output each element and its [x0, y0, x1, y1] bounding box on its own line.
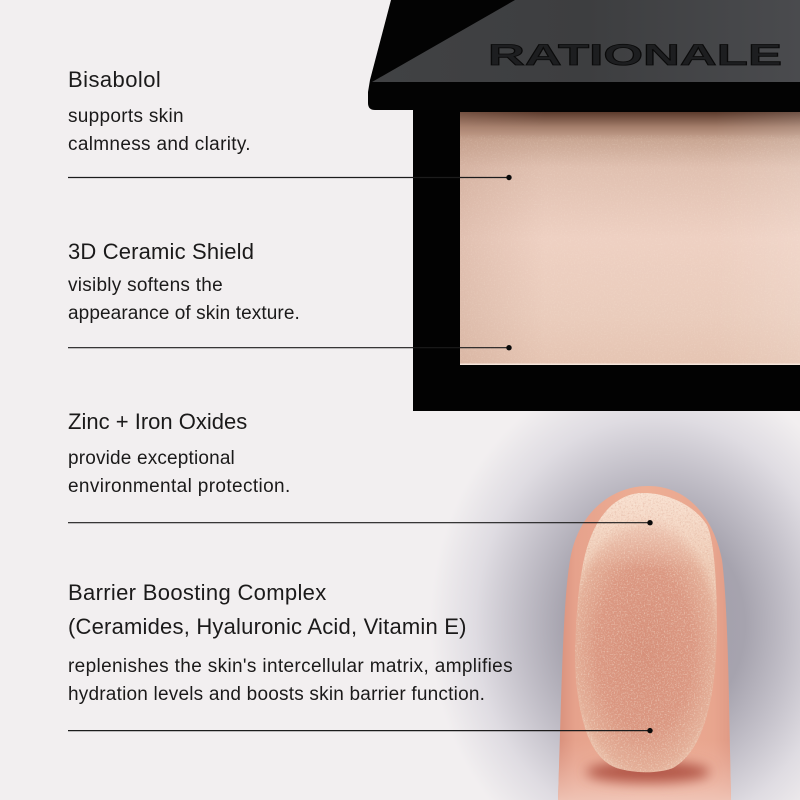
text: Zinc + Iron Oxides description — [68, 448, 291, 497]
text: 3D Ceramic Shield description: visibly softens the — [68, 275, 223, 296]
text: Barrier Boosting Complex description — [68, 656, 513, 705]
compact lid — [368, 0, 800, 110]
heading: Bisabolol: Bisabolol — [68, 67, 161, 92]
finger — [555, 484, 735, 800]
heading: Barrier Boosting Complex — [68, 580, 467, 639]
leader line 4 — [68, 728, 653, 733]
brand mark: RATIONALE — [488, 39, 782, 72]
finger with powder swatch — [555, 484, 735, 800]
text: Bisabolol description — [68, 106, 251, 155]
text: Zinc + Iron Oxides description: environmental protection. — [68, 476, 291, 497]
text: Zinc + Iron Oxides description: provide exceptional — [68, 448, 235, 469]
text: Bisabolol description: supports skin — [68, 106, 184, 127]
powder swatch — [575, 493, 717, 772]
text: 3D Ceramic Shield description — [68, 275, 300, 324]
powder pan — [460, 112, 800, 365]
text: 3D Ceramic Shield description: appearance of skin texture. — [68, 303, 300, 324]
heading: 3D Ceramic Shield: 3D Ceramic Shield — [68, 239, 254, 264]
compact product — [368, 0, 800, 411]
lid top facet — [372, 0, 800, 82]
compact base frame — [413, 100, 800, 411]
leader line 1 — [68, 175, 512, 180]
text: Barrier Boosting Complex description: hydration levels and boosts skin barrier function. — [68, 684, 485, 705]
text: Bisabolol description: calmness and clarity. — [68, 134, 251, 155]
heading: Barrier Boosting Complex: (Ceramides, Hyaluronic Acid, Vitamin E) — [68, 614, 467, 639]
finger shadow — [420, 360, 800, 800]
heading: Zinc + Iron Oxides: Zinc + Iron Oxides — [68, 409, 247, 434]
leader line 2 — [68, 345, 512, 350]
heading: Barrier Boosting Complex: Barrier Boosting Complex — [68, 580, 327, 605]
leader line 3 — [68, 520, 653, 525]
text: Barrier Boosting Complex description: replenishes the skin's intercellular matrix, amplifies — [68, 656, 513, 677]
